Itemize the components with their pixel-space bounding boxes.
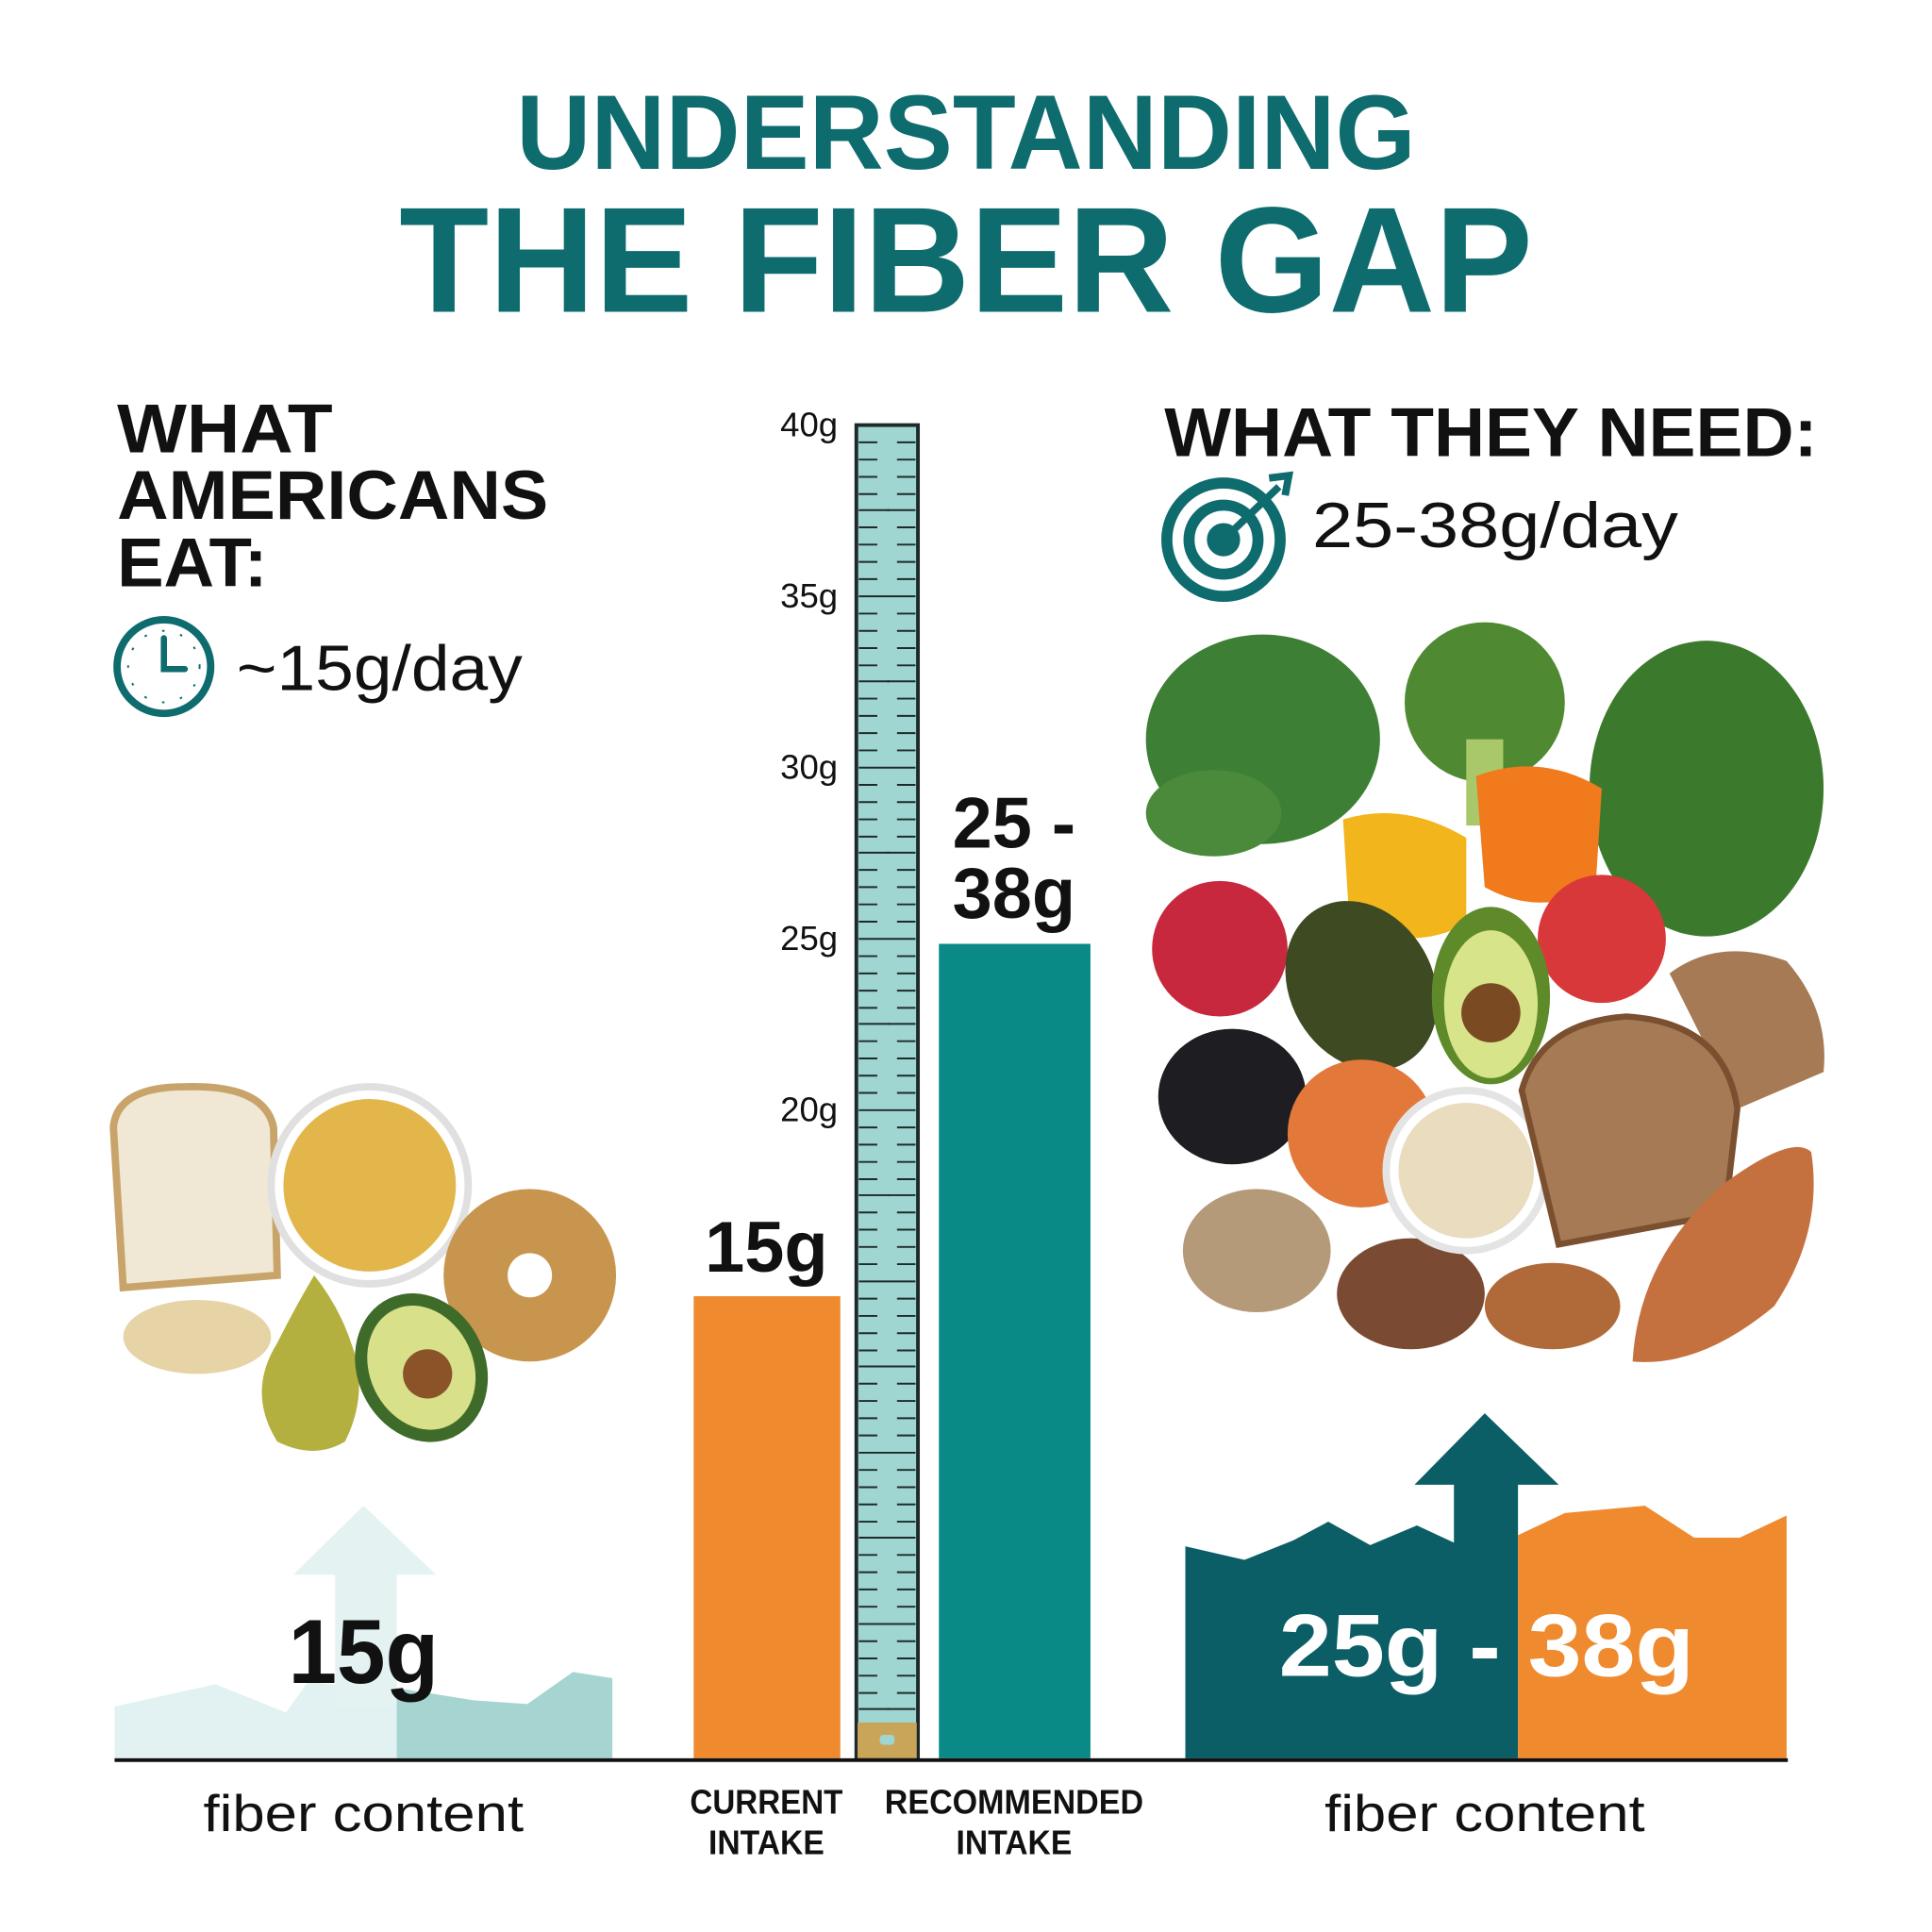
chart: right fiber content: 25g - <box>1279 1595 1501 1694</box>
x labels: RECOMMENDED <box>885 1783 1143 1822</box>
icon: clock <box>117 620 210 713</box>
title: UNDERSTANDING <box>516 73 1416 192</box>
food: high fiber foods <box>1146 623 1824 1362</box>
chart: left fiber content: 15g <box>289 1602 439 1703</box>
x labels: fiber content <box>1324 1784 1645 1842</box>
ruler labels: 20g <box>780 1091 838 1129</box>
x labels: fiber content <box>204 1784 524 1842</box>
heading: what americans eat <box>117 391 548 602</box>
ruler <box>857 425 918 1758</box>
bar label: 25-38g: 25 - <box>953 784 1075 864</box>
heading: what americans eat: WHAT <box>117 391 333 467</box>
text: recommended value: 25-38g/day <box>1312 491 1678 561</box>
ruler labels: 35g <box>780 576 838 615</box>
title: THE FIBER GAP <box>399 175 1533 343</box>
ruler labels <box>780 405 838 1129</box>
bar label: 15g: 15g <box>705 1208 828 1288</box>
heading: what they need: WHAT THEY NEED: <box>1164 394 1818 471</box>
x labels: INTAKE <box>957 1824 1072 1862</box>
x labels: INTAKE <box>708 1824 824 1862</box>
text: current intake value: ~15g/day <box>237 633 523 704</box>
x labels <box>204 1783 1645 1862</box>
icon: target <box>1167 475 1289 596</box>
bar label: 25-38g <box>953 784 1075 934</box>
bar: current intake <box>693 1296 841 1758</box>
heading: what americans eat: AMERICANS <box>117 458 548 534</box>
ruler labels: 40g <box>780 405 838 443</box>
axis baseline <box>114 1758 1788 1762</box>
bar label: 25-38g: 38g <box>953 854 1075 934</box>
x labels: CURRENT <box>690 1783 842 1822</box>
ruler labels: 25g <box>780 919 838 958</box>
title <box>399 73 1533 343</box>
ruler labels: 30g <box>780 747 838 786</box>
heading: what americans eat: EAT: <box>117 525 267 602</box>
chart: right fiber content: 38g <box>1528 1595 1694 1694</box>
chart: left fiber content <box>114 1506 612 1758</box>
food: low fiber foods <box>113 1087 616 1464</box>
chart: right fiber content <box>1185 1413 1787 1758</box>
bar: recommended intake <box>939 943 1091 1758</box>
